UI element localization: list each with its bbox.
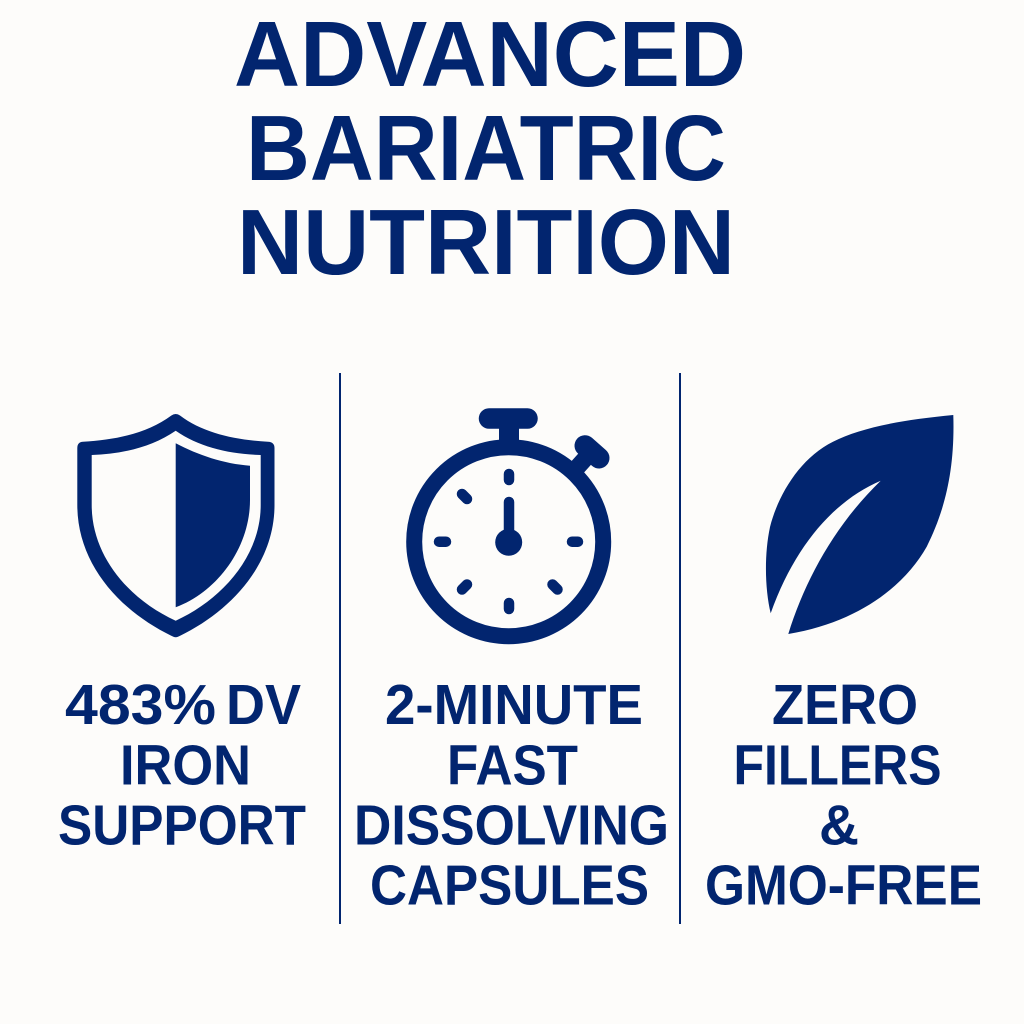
title: ADVANCED: [234, 2, 746, 106]
label: zero fillers and GMO-free: GMO-FREE: [705, 854, 982, 918]
title: NUTRITION: [237, 190, 735, 294]
title: BARIATRIC: [246, 96, 726, 200]
label: 2-minute fast dissolving capsules: 2-MINUTE: [385, 673, 643, 737]
label: 2-minute fast dissolving capsules: CAPSULES: [370, 854, 649, 918]
label: zero fillers and GMO-free: ZERO: [772, 673, 918, 737]
label: 483% DV iron support: 483%: [65, 673, 216, 737]
label: zero fillers and GMO-free: FILLERS: [734, 734, 942, 798]
panel: iron support: [58, 414, 306, 858]
icon: leaf: [766, 415, 953, 634]
panel: zero fillers: [705, 415, 982, 918]
label: 483% DV iron support: IRON: [120, 734, 251, 798]
label: 483% DV iron support: SUPPORT: [58, 794, 306, 858]
label: zero fillers and GMO-free: [705, 673, 982, 918]
label: 2-minute fast dissolving capsules: DISSOLVING: [354, 794, 669, 858]
label: 2-minute fast dissolving capsules: FAST: [447, 734, 578, 798]
label: zero fillers and GMO-free: &: [819, 794, 859, 858]
label: 483% DV iron support: DV: [226, 673, 301, 737]
icon: shield: [77, 414, 274, 637]
panel: fast dissolving: [354, 418, 669, 918]
label: 2-minute fast dissolving capsules: [354, 673, 669, 918]
title: [234, 2, 746, 294]
label: 483% DV iron support: [58, 673, 306, 858]
icon: stopwatch: [414, 418, 603, 636]
